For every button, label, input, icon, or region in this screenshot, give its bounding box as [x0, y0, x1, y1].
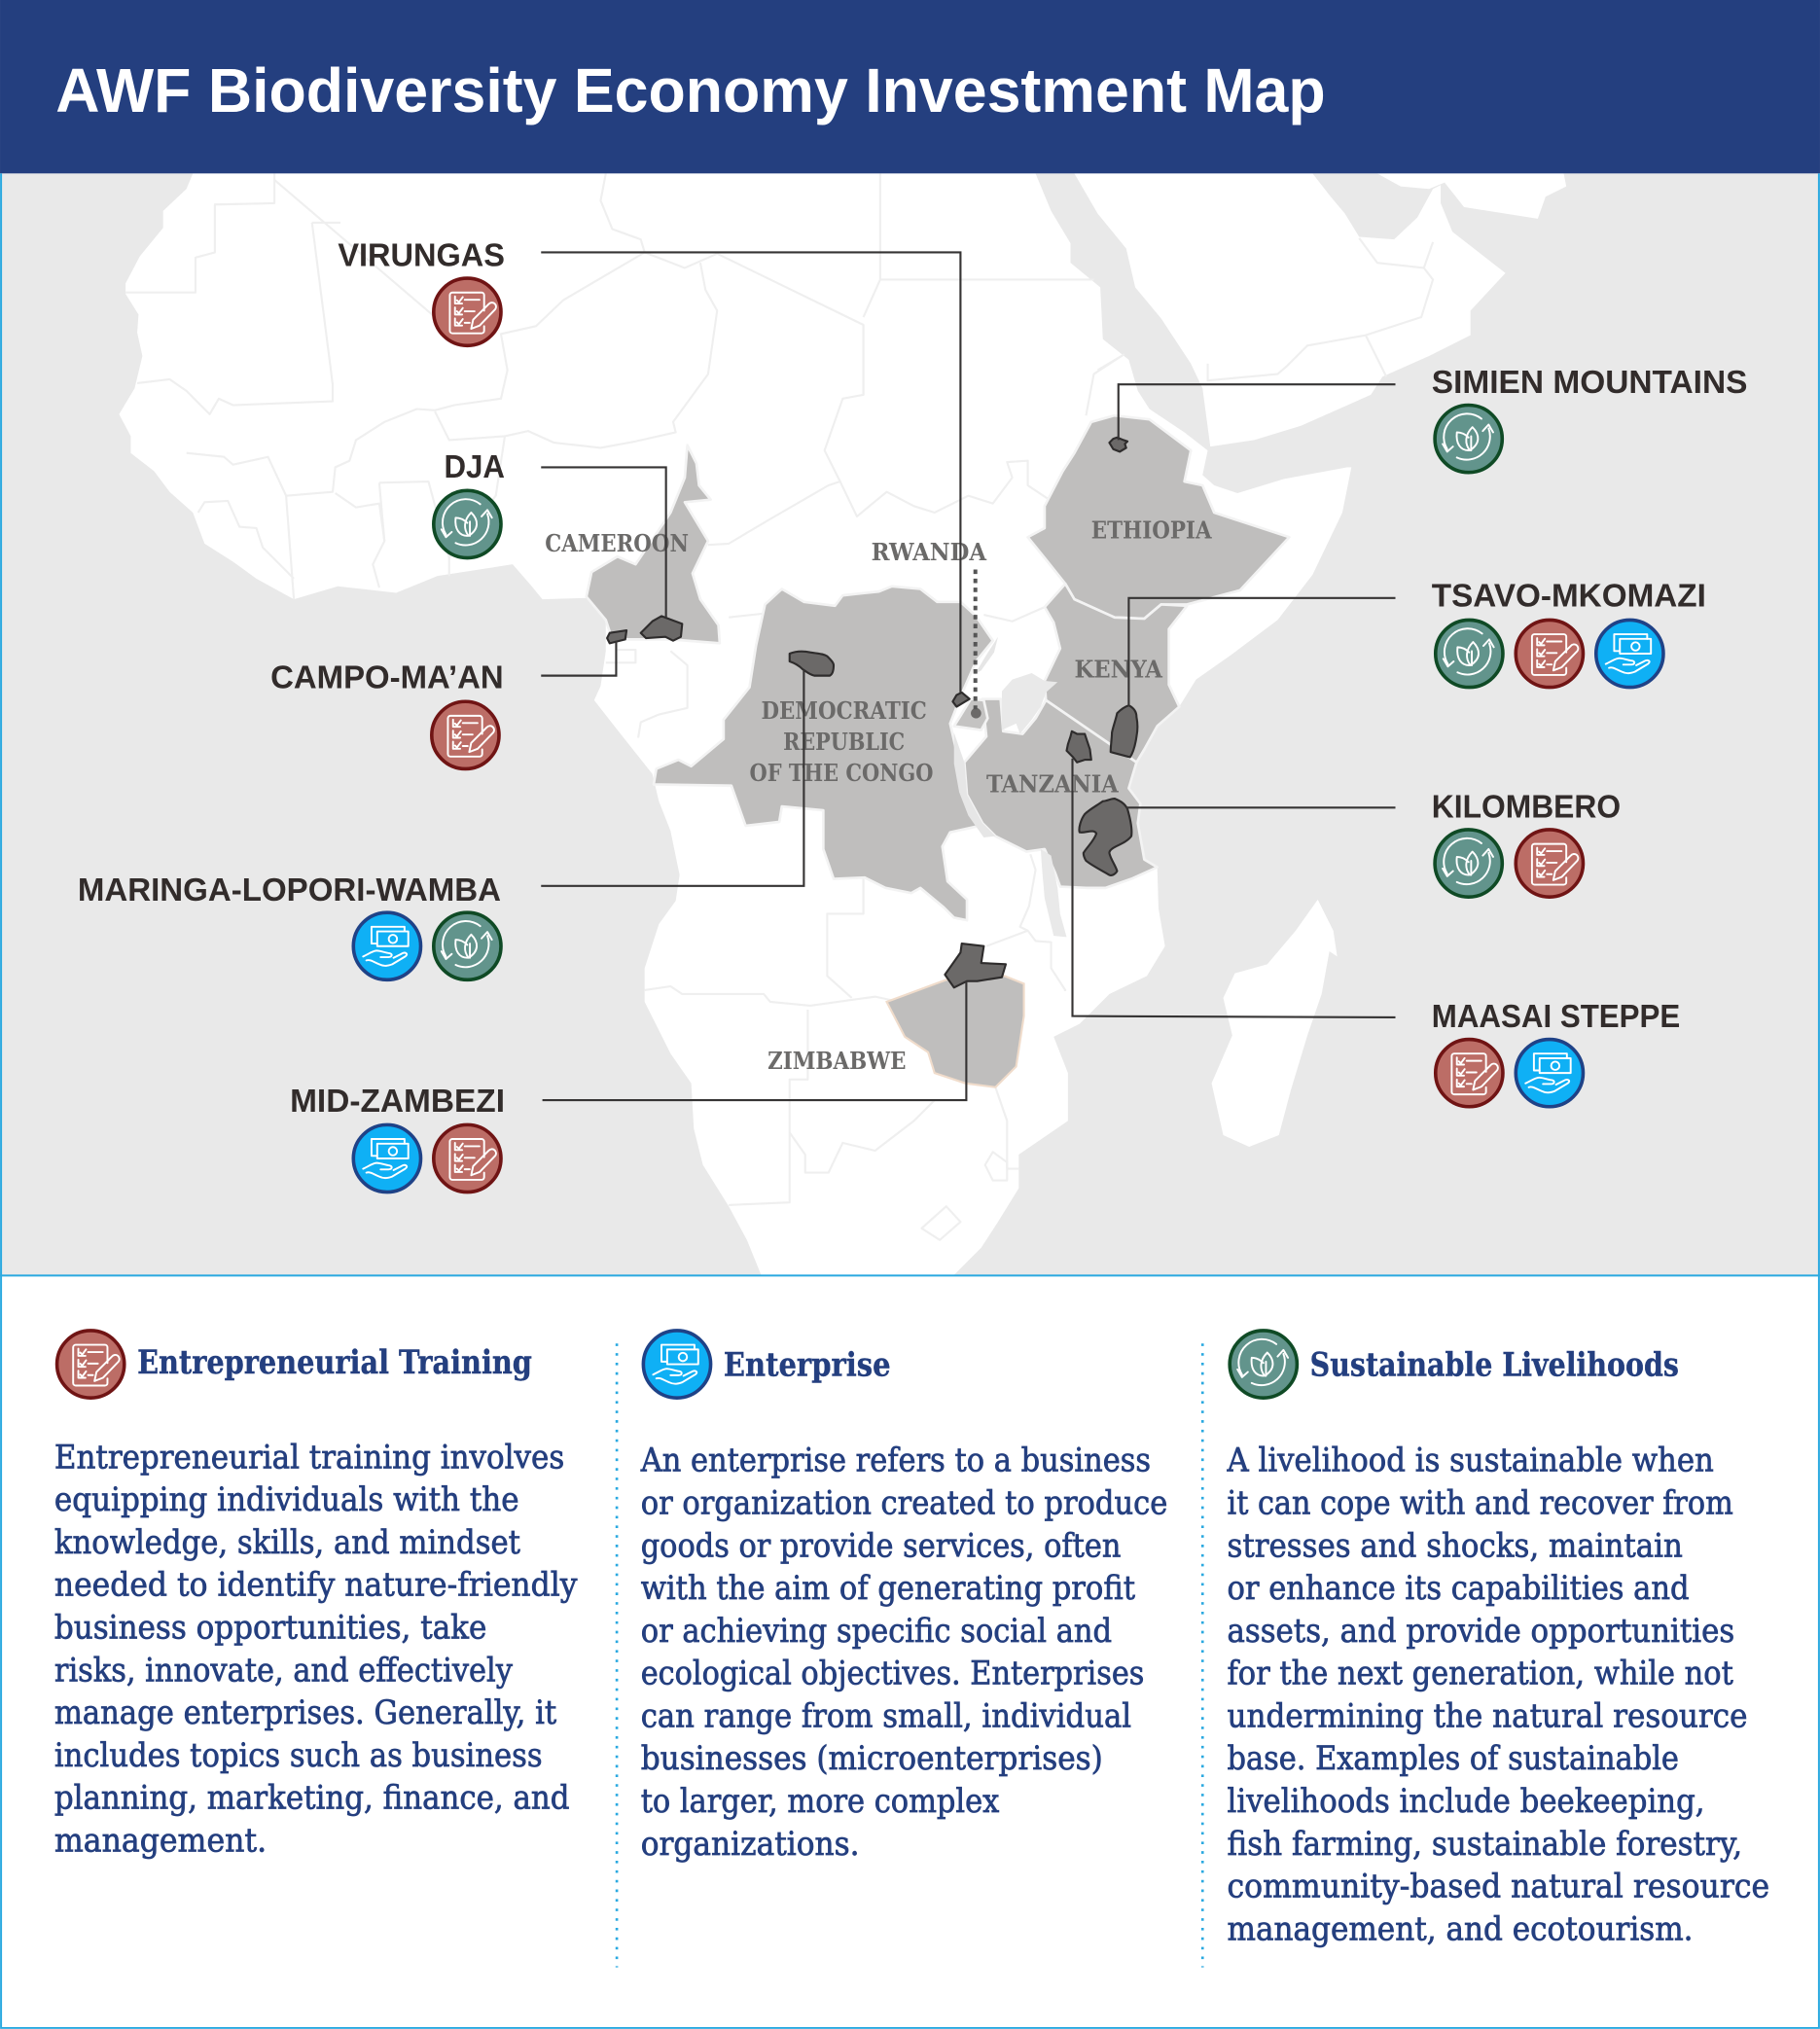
text block: Entrepreneurial Training description: planning, marketing, finance, and	[54, 1780, 570, 1818]
text block: Enterprise description: or organization created to produce	[641, 1485, 1167, 1523]
text block: Entrepreneurial Training description: risks, innovate, and effectively	[54, 1652, 514, 1690]
connector lines	[541, 252, 1396, 1100]
text block: Entrepreneurial Training description: includes topics such as business	[54, 1737, 543, 1775]
label: Simien Mountains: SIMIEN MOUNTAINS	[1432, 365, 1747, 401]
country borders	[125, 173, 1433, 1240]
icon: sustainable livelihoods	[1435, 406, 1502, 473]
label: Mid-Zambezi	[290, 1084, 505, 1192]
text block: Entrepreneurial Training description	[54, 1439, 578, 1860]
country: Ethiopia	[1028, 415, 1289, 619]
dotted column divider	[1201, 1343, 1203, 1968]
label: Virungas: VIRUNGAS	[338, 238, 505, 274]
label: Dja	[434, 449, 505, 558]
ocean	[0, 173, 1820, 1275]
text block: Entrepreneurial Training description: Entrepreneurial training involves	[54, 1439, 564, 1477]
lake: Albert	[975, 637, 998, 674]
site: Maasai Steppe	[1067, 731, 1091, 763]
icon: enterprise	[1596, 620, 1663, 688]
lake: Tanganyika	[954, 732, 995, 837]
country labels	[545, 517, 1212, 1075]
icon: enterprise	[1516, 1040, 1583, 1107]
icon: entrepreneurial training	[434, 278, 501, 345]
text block: Entrepreneurial Training description: management.	[54, 1822, 267, 1860]
icon: entrepreneurial training	[57, 1331, 125, 1398]
text block: Entrepreneurial Training description: needed to identify nature-friendly	[54, 1567, 578, 1605]
text block: Enterprise description: businesses (microenterprises)	[641, 1740, 1103, 1778]
label: Tsavo-Mkomazi: TSAVO-MKOMAZI	[1432, 579, 1706, 615]
land: Arabia	[1074, 173, 1506, 446]
text block: Sustainable Livelihoods description: community-based natural resource	[1228, 1869, 1769, 1906]
label: Maringa-Lopori-Wamba	[78, 872, 501, 979]
text block: Entrepreneurial Training description: equipping individuals with the	[54, 1481, 519, 1519]
panel: Enterprise	[640, 1331, 1167, 1864]
country labels: ZIMBABWE	[767, 1048, 907, 1075]
icon: sustainable livelihoods	[1435, 830, 1502, 897]
country labels: CAMEROON	[545, 530, 689, 557]
title: AWF Biodiversity Economy Investment Map	[55, 55, 1326, 125]
icon: entrepreneurial training	[432, 701, 499, 768]
label: Maringa-Lopori-Wamba: MARINGA-LOPORI-WAMBA	[78, 872, 501, 908]
text block: Enterprise description: with the aim of generating profit	[641, 1570, 1135, 1608]
panel: Entrepreneurial Training	[54, 1331, 578, 1860]
label: Maasai Steppe: MAASAI STEPPE	[1432, 999, 1680, 1035]
country: Kenya	[1045, 584, 1187, 763]
country: Rwanda	[954, 699, 987, 730]
text block: Enterprise description: goods or provide services, often	[641, 1527, 1121, 1565]
icon: entrepreneurial training	[1516, 830, 1583, 897]
text block: Sustainable Livelihoods description: A livelihood is sustainable when	[1227, 1442, 1714, 1480]
header band	[0, 0, 1820, 173]
text block: Sustainable Livelihoods description: or enhance its capabilities and	[1228, 1570, 1690, 1608]
icon: enterprise	[353, 1124, 420, 1192]
label: Mid-Zambezi: MID-ZAMBEZI	[290, 1084, 505, 1120]
text block: Entrepreneurial Training description: business opportunities, take	[54, 1610, 486, 1648]
country labels: DEMOCRATIC	[761, 697, 927, 725]
map panel	[0, 173, 1820, 1275]
Rwanda marker dot	[971, 708, 981, 719]
lake: Victoria	[1002, 673, 1057, 734]
site: Simien Mountains	[1109, 438, 1127, 451]
text block: Sustainable Livelihoods description: undermining the natural resource	[1228, 1697, 1747, 1735]
dotted column divider	[616, 1343, 618, 1968]
site: Maringa-Lopori-Wamba	[790, 652, 834, 676]
text block: Enterprise description: An enterprise refers to a business	[640, 1442, 1151, 1480]
label: Virungas	[338, 238, 505, 345]
icon: enterprise	[643, 1331, 711, 1398]
text block: Enterprise description: can range from small, individual	[641, 1697, 1131, 1735]
heading: Sustainable Livelihoods: Sustainable Livelihoods	[1310, 1346, 1679, 1384]
text block: Entrepreneurial Training description: knowledge, skills, and mindset	[54, 1524, 520, 1562]
country: Zimbabwe	[887, 976, 1024, 1087]
label: Kilombero	[1432, 789, 1621, 897]
label: Dja: DJA	[444, 449, 505, 485]
country labels: KENYA	[1074, 657, 1162, 684]
text block: Enterprise description: ecological objectives. Enterprises	[641, 1655, 1144, 1693]
country: Cameroon	[587, 445, 720, 643]
panel: Sustainable Livelihoods	[1227, 1331, 1769, 1948]
label: Simien Mountains	[1432, 365, 1747, 473]
icon: sustainable livelihoods	[434, 490, 501, 558]
text block: Sustainable Livelihoods description: management, and ecotourism.	[1228, 1910, 1694, 1948]
text block: Enterprise description: organizations.	[641, 1826, 860, 1864]
heading: Enterprise: Enterprise	[724, 1346, 891, 1384]
text block: Sustainable Livelihoods description	[1227, 1442, 1769, 1948]
icon: sustainable livelihoods	[434, 912, 501, 979]
country labels: REPUBLIC	[783, 729, 905, 756]
text block: Sustainable Livelihoods description: assets, and provide opportunities	[1228, 1613, 1734, 1651]
text block: Entrepreneurial Training description: manage enterprises. Generally, it	[54, 1694, 557, 1732]
country: Tanzania	[964, 699, 1158, 888]
land: Madagascar	[1212, 900, 1338, 1147]
text block: Sustainable Livelihoods description: it can cope with and recover from	[1228, 1485, 1733, 1523]
icon: sustainable livelihoods	[1230, 1331, 1297, 1398]
country labels: RWANDA	[872, 539, 986, 566]
text block: Enterprise description: to larger, more complex	[641, 1783, 999, 1821]
icon: enterprise	[353, 912, 420, 979]
site: Tsavo-Mkomazi	[1111, 705, 1137, 757]
icon: entrepreneurial training	[1516, 620, 1583, 688]
site: Campo-Ma'an	[607, 630, 626, 643]
country labels: OF THE CONGO	[749, 760, 933, 787]
label: Campo-Ma'an: CAMPO-MA’AN	[270, 660, 504, 696]
text block: Sustainable Livelihoods description: fish farming, sustainable forestry,	[1228, 1826, 1742, 1864]
text block: Sustainable Livelihoods description: for the next generation, while not	[1228, 1655, 1733, 1693]
text block: Enterprise description: or achieving specific social and	[641, 1613, 1112, 1651]
country labels: ETHIOPIA	[1091, 517, 1212, 545]
site: Kilombero	[1079, 799, 1131, 875]
lakes	[954, 637, 1067, 937]
country labels: TANZANIA	[986, 770, 1119, 798]
heading: Entrepreneurial Training: Entrepreneurial Training	[137, 1343, 532, 1381]
text block: Sustainable Livelihoods description: base. Examples of sustainable	[1228, 1740, 1679, 1778]
text block: Sustainable Livelihoods description: livelihoods include beekeeping,	[1228, 1783, 1705, 1821]
label: Campo-Ma'an	[270, 660, 504, 768]
site: Mid-Zambezi	[945, 943, 1006, 987]
icon: entrepreneurial training	[434, 1124, 501, 1192]
site: Virungas	[952, 693, 970, 707]
label: Tsavo-Mkomazi	[1432, 579, 1706, 688]
country: Democratic Republic of the Congo	[654, 587, 993, 920]
text block: Enterprise description	[640, 1442, 1167, 1864]
label: Maasai Steppe	[1432, 999, 1680, 1107]
land: Africa	[119, 173, 1351, 1275]
site: Dja	[641, 616, 682, 641]
label: Kilombero: KILOMBERO	[1432, 789, 1621, 825]
land: Iran	[1377, 173, 1566, 219]
lake: Malawi	[1041, 849, 1067, 937]
icon: entrepreneurial training	[1436, 1040, 1503, 1107]
icon: sustainable livelihoods	[1436, 620, 1503, 688]
text block: Sustainable Livelihoods description: stresses and shocks, maintain	[1228, 1527, 1683, 1565]
